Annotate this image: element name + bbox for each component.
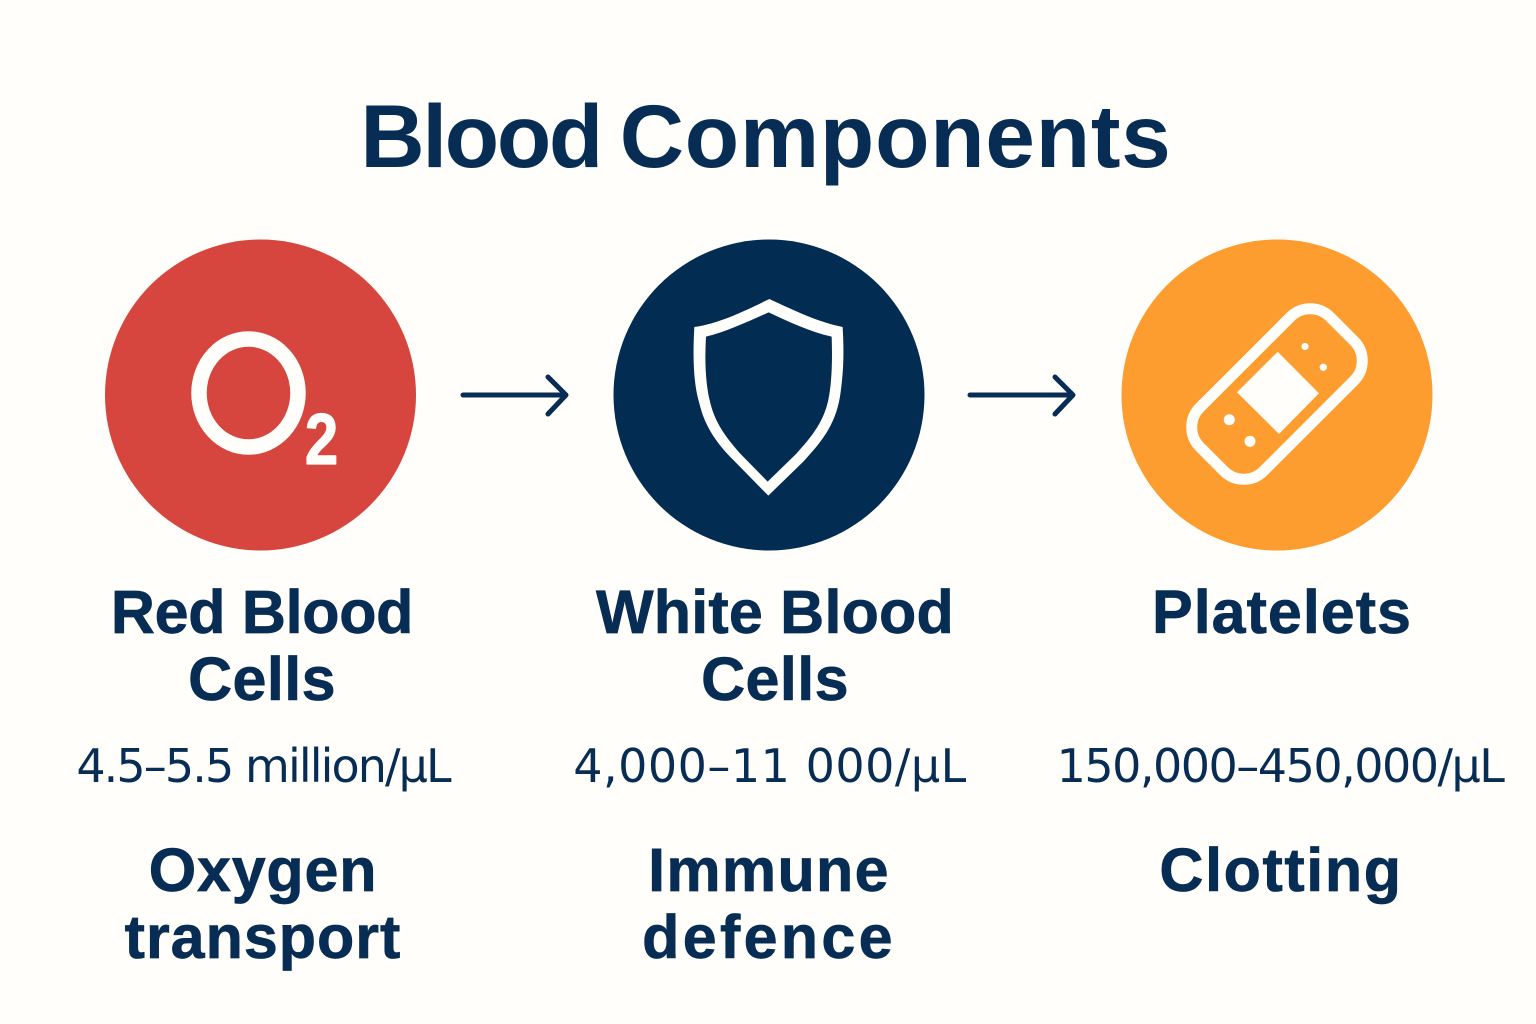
function: oxygen transport: transport [125, 903, 401, 971]
heading: white blood cells: White Blood [596, 578, 954, 646]
value: white blood cells count: 4,000–11 000/μL [573, 739, 967, 793]
arrow: red to white [460, 374, 568, 416]
value: red blood cells count: 4.5–5.5 million/μL [76, 739, 450, 793]
heading: white blood cells [596, 578, 954, 713]
function: immune defence [642, 836, 896, 971]
heading: platelets: Platelets [1152, 578, 1412, 646]
heading: white blood cells: Cells [701, 645, 849, 713]
function: oxygen transport: Oxygen [149, 836, 377, 904]
function: clotting: Clotting [1159, 836, 1403, 904]
heading: red blood cells: Red Blood [111, 578, 413, 646]
function: immune defence: Immune [648, 836, 890, 904]
value: platelets count: 150,000–450,000/μL [1057, 739, 1503, 793]
icon: red circle with O2: 2 [305, 400, 338, 480]
arrow: white to platelets [968, 374, 1076, 416]
function: oxygen transport [125, 836, 401, 971]
title: Blood Components [360, 86, 1172, 186]
heading: red blood cells: Cells [188, 645, 336, 713]
function: immune defence: defence [642, 903, 896, 971]
heading: red blood cells [111, 578, 413, 713]
